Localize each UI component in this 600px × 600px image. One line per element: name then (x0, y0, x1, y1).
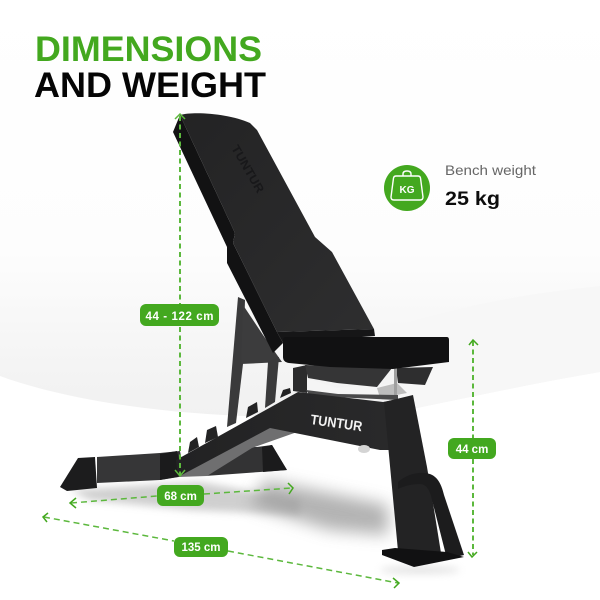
dimension: width: 68 cm (164, 491, 197, 503)
ratchet teeth (188, 388, 291, 453)
seat support bracket (293, 365, 433, 400)
gray underside of beam (178, 423, 300, 477)
main beam (176, 392, 414, 477)
dimension: length (43, 513, 399, 588)
dimension: height range (140, 114, 219, 476)
backrest logo: TUNTUR (228, 142, 267, 196)
backrest top face (180, 113, 374, 332)
frame logo: TUNTUR (310, 411, 363, 434)
rear right foot (205, 445, 287, 476)
rear wheel (358, 445, 370, 453)
front leg (384, 395, 441, 553)
bench weight label: Bench weight (445, 162, 536, 178)
handle tube (398, 473, 464, 559)
rear left foot (60, 457, 97, 491)
icon: weight (384, 165, 430, 211)
dimension: seat height (448, 340, 496, 557)
dimension: seat height: 44 cm (456, 444, 488, 456)
floor shadows (70, 480, 460, 574)
front foot plate (382, 548, 464, 567)
bench weight value: 25 kg (445, 189, 500, 210)
icon: weight: KG (400, 185, 415, 196)
backrest bottom edge (277, 329, 375, 343)
upright support frame (227, 297, 282, 427)
title: AND WEIGHT (34, 66, 266, 105)
dimension: length: 135 cm (181, 542, 221, 554)
base connector plate (160, 451, 183, 480)
rear base bar (97, 451, 185, 483)
title (34, 30, 266, 105)
dimension: width (70, 483, 293, 508)
seat pad (283, 337, 449, 369)
dimension: height range: 44 - 122 cm (146, 311, 214, 323)
backrest side (173, 115, 283, 353)
title: DIMENSIONS (35, 30, 262, 69)
bench (60, 113, 464, 567)
